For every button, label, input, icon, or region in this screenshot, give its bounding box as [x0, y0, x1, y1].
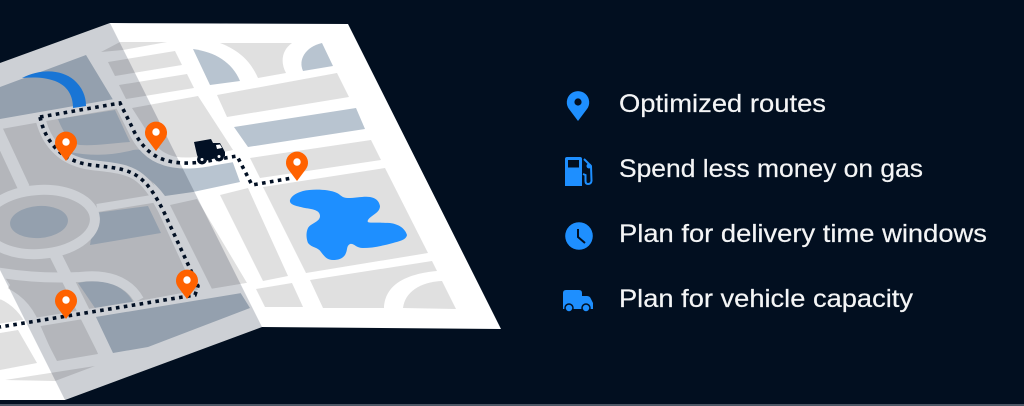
corner road patch — [0, 270, 10, 300]
route dots: upper route — [40, 103, 292, 185]
benefit list — [563, 90, 987, 313]
pin 2 — [145, 122, 167, 151]
park along curved road — [70, 150, 240, 196]
park top left — [0, 55, 115, 122]
icon: fuel pump — [565, 157, 592, 186]
park near roundabout — [90, 206, 161, 245]
small park — [78, 281, 133, 308]
fold shadow panel — [0, 23, 262, 400]
map sheet — [0, 23, 501, 400]
roads — [0, 103, 250, 364]
park between routes — [58, 110, 130, 145]
text: plan for delivery time windows: Plan for delivery time windows — [619, 220, 987, 248]
pin 3 — [286, 152, 308, 181]
map blocks: left panel — [0, 104, 198, 327]
pin 5 — [176, 270, 198, 299]
delivery truck — [194, 139, 225, 164]
text: spend less money on gas: Spend less money on gas — [619, 155, 923, 183]
icon: truck — [563, 290, 593, 312]
lower blocks — [0, 315, 98, 381]
bottom edge line — [0, 404, 1024, 406]
icon: clock — [565, 222, 593, 250]
map blocks: blue-grey parks — [193, 43, 365, 147]
lake — [290, 190, 407, 260]
route dots: lower route — [0, 117, 198, 327]
map blocks: right panel — [101, 42, 456, 309]
text: optimized routes: Optimized routes — [619, 90, 826, 118]
roundabout centre — [9, 204, 69, 240]
pin 1 — [55, 132, 77, 161]
icon: location pin — [567, 91, 589, 121]
text: plan for vehicle capacity: Plan for vehicle capacity — [619, 285, 914, 313]
river — [22, 71, 86, 108]
folded city map — [0, 23, 501, 400]
pin 4 — [55, 290, 77, 319]
large park bottom — [95, 292, 250, 353]
